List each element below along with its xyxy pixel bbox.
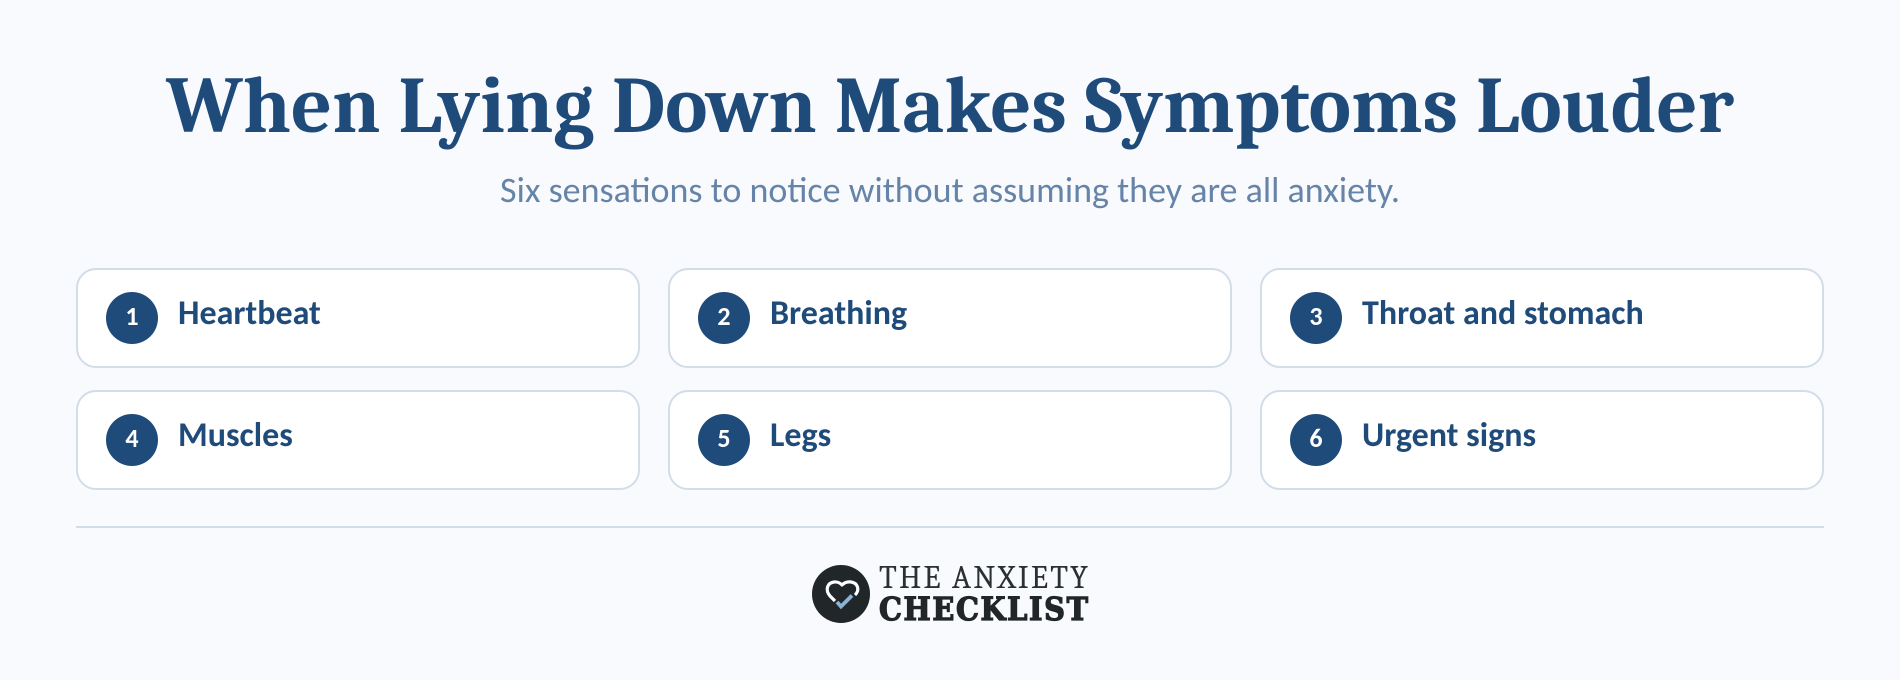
card 3: Throat and stomach: 3	[1309, 300, 1323, 332]
card 3: Throat and stomach: Throat and stomach	[1362, 293, 1644, 334]
card 4: Muscles: 4	[125, 422, 139, 454]
logo wordmark: CHECKLIST	[879, 590, 1089, 628]
card 1: Heartbeat: Heartbeat	[178, 293, 321, 334]
card 2: Breathing: Breathing	[770, 293, 907, 334]
card 6: Urgent signs: Urgent signs	[1362, 415, 1536, 456]
card 1: Heartbeat: 1	[125, 300, 139, 332]
card 6: Urgent signs: 6	[1309, 422, 1323, 454]
card 5: Legs: 5	[717, 422, 731, 454]
card 5: Legs	[668, 390, 1232, 490]
title: When Lying Down Makes Symptoms Louder	[165, 60, 1735, 152]
logo wordmark	[879, 559, 1089, 628]
card 6: Urgent signs	[1260, 390, 1824, 490]
card 4: Muscles	[76, 390, 640, 490]
card 1: Heartbeat	[76, 268, 640, 368]
card 5: Legs: Legs	[770, 415, 831, 456]
card 2: Breathing: 2	[717, 300, 731, 332]
card 3: Throat and stomach	[1260, 268, 1824, 368]
card 2: Breathing	[668, 268, 1232, 368]
subtitle: Six sensations to notice without assuming they are all anxiety.	[500, 168, 1400, 212]
logo wordmark: THE ANXIETY	[879, 559, 1088, 596]
icon: heart with checkmark	[812, 565, 870, 623]
card 4: Muscles: Muscles	[178, 415, 293, 456]
